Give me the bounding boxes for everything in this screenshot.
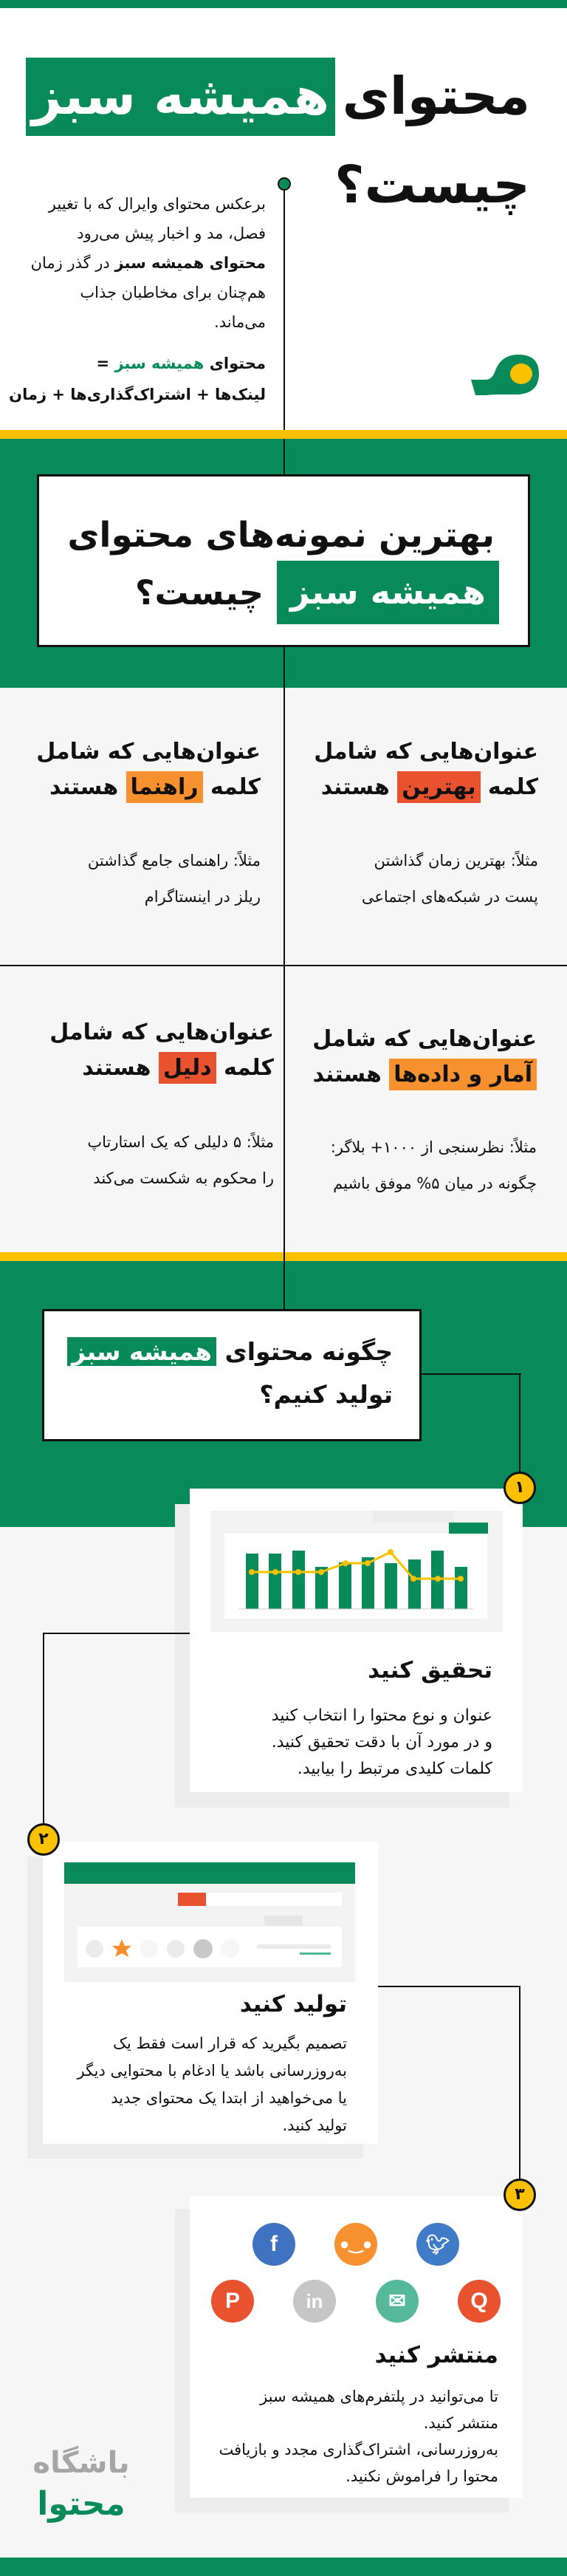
card heading [314,739,538,803]
example text: مثلاً: ۵ دلیلی که یک استارتاپ [87,1133,274,1151]
card heading: کلمه بهترین هستند [321,774,538,800]
formula [9,355,266,403]
heading box: how to produce [42,1309,422,1441]
intro paragraph: فصل، مد و اخبار پیش می‌رود [77,225,266,242]
example text [331,1138,537,1192]
intro paragraph: می‌ماند. [214,313,266,331]
card heading [49,1019,274,1084]
step 2 title: تولید کنید [240,1991,347,2018]
icon: brand logo mark [471,355,539,395]
example text [88,851,261,906]
connector to step 3 [378,1986,520,1987]
step 2 body: به‌روزرسانی باشد یا ادغام با محتوایی دیگر [77,2062,347,2080]
icon: twitter [416,2223,459,2266]
step 1 body: و در مورد آن با دقت تحقیق کنید. [272,1733,492,1752]
section 3 green band [0,1261,567,1527]
example text: پست در شبکه‌های اجتماعی [362,888,538,906]
title word: چیست؟: چیست؟ [334,154,530,215]
heading line 1: بهترین نمونه‌های محتوای [67,515,495,556]
step 2 body [77,2035,347,2134]
top green bar [0,0,567,8]
yellow divider [0,1252,567,1261]
step 3 body: محتوا را فراموش نکنید. [346,2467,498,2485]
step 2 body: یا می‌خواهید از ابتدا یک محتوای جدید [111,2089,347,2107]
step 1 body: کلمات کلیدی مرتبط را بیابید. [298,1760,492,1778]
card heading [312,1026,537,1090]
title: main heading [26,58,530,216]
example text: مثلاً: بهترین زمان گذاشتن [374,852,538,870]
card 1 shadow [175,1504,509,1808]
intro paragraph [31,195,266,331]
card heading: عنوان‌هایی که شامل [49,1019,274,1045]
brand logo: باشگاه محتوا: محتوا [37,2485,126,2523]
panel: دلیل [49,1019,274,1187]
brand logo: باشگاه محتوا: باشگاه [32,2446,130,2480]
step 2 body: تصمیم بگیرید که قرار است فقط یک [113,2035,347,2052]
step 3 body: تا می‌توانید در پلتفرم‌های همیشه سبز [260,2388,498,2405]
card heading: عنوان‌هایی که شامل [314,739,538,765]
panel: آمار و داده‌ها [312,1026,537,1192]
icon: pinterest [211,2280,254,2323]
connector to step 2 [43,1633,190,1634]
icon: quora: Q [470,2289,488,2313]
badge: step 2 [27,1823,60,1856]
card heading: عنوان‌هایی که شامل [312,1026,537,1052]
card heading [36,739,261,803]
panel: بهترین [314,739,538,906]
card 2 shadow [27,1856,363,2159]
formula: لینک‌ها + اشتراک‌گذاری‌ها + زمان [9,386,266,403]
badge: step 1 [504,1472,536,1504]
heading box: best examples [37,474,530,647]
icon: facebook [252,2223,295,2266]
example text: را محکوم به شکست می‌کند [93,1169,274,1187]
example text [362,851,538,906]
example text: مثلاً: نظرسنجی از ۱۰۰۰+ بلاگر: [331,1138,537,1156]
badge: step 2: ۲ [38,1830,49,1848]
card: step 2 produce [43,1842,378,2144]
step 3 body: به‌روزرسانی، اشتراک‌گذاری مجدد و بازیافت [219,2441,498,2459]
icon: linkedin [293,2280,336,2323]
icon: email: ✉ [388,2289,406,2312]
example text: مثلاً: راهنمای جامع گذاشتن [88,852,261,870]
chart [210,1511,503,1632]
intro paragraph: برعکس محتوای وایرال که با تغییر [49,195,266,213]
top section background [0,0,567,430]
heading line 1: چگونه محتوای همیشه سبز [72,1337,393,1366]
example text [87,1132,274,1187]
step 3 body: منتشر کنید. [424,2414,498,2432]
intro paragraph: هم‌چنان برای مخاطبان جذاب [80,284,266,301]
step 1 body: عنوان و نوع محتوا را انتخاب کنید [272,1706,492,1725]
connector to step 1 [422,1373,521,1375]
divider between rows [0,965,567,966]
badge: step 3: ۳ [515,2185,525,2204]
step 2 body: تولید کنید. [282,2117,347,2134]
heading line 2: تولید کنیم؟ [259,1380,393,1409]
example text: ریلز در اینستاگرام [145,888,261,906]
heading line 2 word: چیست؟ [135,573,264,612]
icon: reddit: ●‿● [340,2235,372,2253]
section 2 green band [0,439,567,688]
step 3 body [219,2388,498,2485]
timeline start dot [278,177,291,191]
title highlight: همیشه سبز: همیشه سبز [32,66,329,126]
badge: step 3 [504,2179,536,2211]
icon: pinterest: P [225,2289,240,2313]
step 1 title: تحقیق کنید [368,1657,492,1684]
step 1 body [272,1706,492,1778]
card: step 3 publish [190,2196,523,2498]
title word: محتوای: محتوای [343,66,530,126]
mockup illustration [64,1862,355,1982]
icon: facebook: f [270,2232,278,2256]
icon: quora [458,2280,501,2323]
formula: محتوای همیشه سبز = [97,355,266,372]
card heading: کلمه دلیل هستند [82,1055,274,1081]
card: step 1 research [190,1489,523,1792]
panel: راهنما [36,739,261,906]
heading line 2 highlight: همیشه سبز [290,572,486,612]
heading line 2 highlight [277,561,499,624]
icon: linkedin: in [306,2290,323,2312]
card heading: آمار و داده‌ها هستند [313,1062,532,1087]
badge: step 1: ۱ [515,1478,525,1497]
icon: reddit [334,2223,377,2266]
yellow divider [0,430,567,439]
intro paragraph: محتوای همیشه سبز در گذر زمان [31,254,266,272]
card heading: عنوان‌هایی که شامل [36,739,261,765]
brand logo: باشگاه محتوا [32,2445,130,2523]
timeline vertical line [284,184,285,1309]
bottom green bar [0,2558,567,2576]
icon: twitter: 🐦︎ [425,2233,450,2255]
step 3 title: منتشر کنید [375,2342,498,2368]
icon: email [376,2280,419,2323]
card 3 shadow [175,2209,509,2512]
example text: چگونه در میان ۵% موفق باشیم [333,1175,537,1192]
card heading: کلمه راهنما هستند [49,774,261,800]
